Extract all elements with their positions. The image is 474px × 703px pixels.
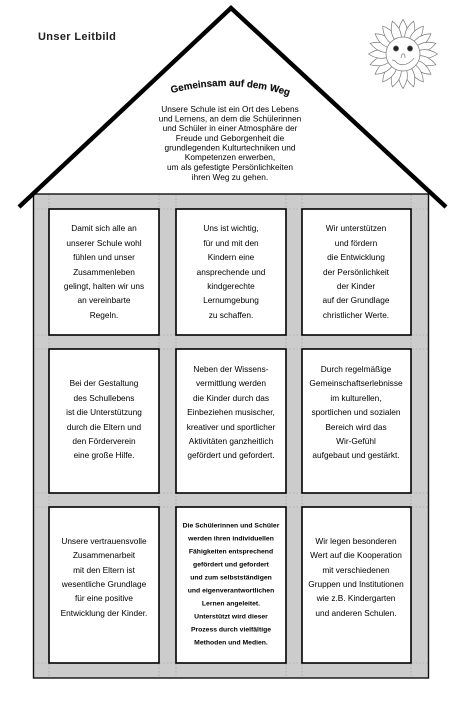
panel: row 3 column 2: Methoden und Medien. (194, 640, 268, 646)
panel: row 3 column 2 (176, 507, 286, 663)
roof text block: ihren Weg zu gehen. (192, 172, 268, 182)
panel: row 1 column 2: zu schaffen. (209, 310, 253, 320)
panel: row 3 column 3: Wert auf die Kooperation (310, 550, 402, 560)
panel: row 2 column 1: des Schullebens (74, 393, 134, 403)
panel: row 2 column 2: Einbeziehen musischer, (187, 407, 275, 417)
panel: row 3 column 1: Zusammenarbeit (73, 550, 136, 560)
panel: row 2 column 2: kreativer und sportlicher (187, 422, 276, 432)
panel: row 3 column 2: werden ihren individuellen (187, 536, 274, 542)
panel: row 2 column 3: Bereich wird das (325, 422, 387, 432)
panel: row 2 column 2: Aktivitäten ganzheitlich (189, 436, 274, 446)
panel: row 1 column 2: Uns ist wichtig, (203, 223, 259, 233)
panel: row 2 column 1: eine große Hilfe. (74, 450, 134, 460)
panel: row 1 column 1: fühlen und unser (73, 252, 135, 262)
panel: row 1 column 2: ansprechende und (197, 267, 266, 277)
panel: row 2 column 3: sportlichen und sozialen (311, 407, 401, 417)
panel: row 2 column 2: vermittlung werden (196, 378, 266, 388)
panel: row 2 column 2: die Kinder durch das (193, 393, 269, 403)
panel: row 3 column 3: mit verschiedenen (322, 565, 390, 575)
panel: row 3 column 2: Fähigkeiten entsprechend (189, 548, 273, 556)
panel: row 3 column 3: wie z.B. Kindergarten (316, 593, 396, 603)
panel: row 1 column 3: christlicher Werte. (323, 310, 389, 320)
roof text block (159, 104, 302, 182)
title: Unser Leitbild (38, 31, 116, 43)
panel: row 1 column 2: für und mit den (203, 238, 259, 248)
panel: row 3 column 2: Lernen angeleitet. (202, 600, 260, 608)
panel: row 2 column 1: Bei der Gestaltung (70, 378, 139, 388)
panel: row 3 column 1: für eine positive (75, 593, 133, 603)
roof heading: curved motto: Gemeinsam auf dem Weg (170, 80, 290, 97)
panel: row 3 column 3: Gruppen und Institutionen (308, 579, 404, 589)
panel: row 3 column 1 (49, 507, 159, 663)
panel: row 2 column 2: Neben der Wissens- (193, 364, 269, 374)
roof text block: Kompetenzen erwerben, (185, 152, 275, 162)
roof text block: Freude und Geborgenheit die (176, 133, 285, 143)
panel: row 1 column 3: und fördern (335, 238, 378, 248)
panel: row 1 column 1: Damit sich alle an (71, 223, 137, 233)
panel: row 1 column 2: Kindern eine (208, 252, 255, 262)
roof text block: Unsere Schule ist ein Ort des Lebens (161, 104, 299, 114)
icon: sun (368, 20, 438, 88)
panel: row 1 column 3: auf der Grundlage (323, 295, 390, 305)
panel: row 2 column 1: durch die Eltern und (67, 422, 142, 432)
panel: row 3 column 3: und anderen Schulen. (315, 608, 397, 618)
house body (34, 194, 428, 678)
panel: row 3 column 3 (302, 507, 411, 663)
panel: row 2 column 2: gefördert und gefordert. (187, 450, 275, 460)
roof text block: und Lernens, an dem die Schülerinnen (159, 114, 302, 124)
panel: row 1 column 1: an vereinbarte (77, 295, 131, 305)
panel: row 2 column 3: Gemeinschaftserlebnisse (309, 378, 403, 388)
panel: row 3 column 1: wesentliche Grundlage (61, 579, 147, 589)
roof text block: und Schüler in einer Atmosphäre der (163, 123, 298, 133)
panel: row 1 column 1: Zusammenleben (73, 267, 135, 277)
panel: row 3 column 1: mit den Eltern ist (73, 565, 136, 575)
panel: row 1 column 1: gelingt, halten wir uns (64, 281, 144, 291)
panel: row 2 column 1: ist die Unterstützung (66, 407, 142, 417)
panel: row 3 column 2: Die Schülerinnen und Schüler (183, 522, 280, 530)
panel: row 1 column 2: Lernumgebung (203, 295, 259, 305)
panel: row 1 column 2 (176, 209, 286, 335)
panel: row 2 column 1 (49, 349, 159, 493)
panel: row 1 column 3: die Entwicklung (327, 252, 385, 262)
panel: row 2 column 3 (302, 349, 411, 493)
panel: row 2 column 3: Durch regelmäßige (321, 364, 392, 374)
roof text block: grundlegenden Kulturtechniken und (164, 142, 296, 152)
panel: row 1 column 1 (49, 209, 159, 335)
panel: row 1 column 3: der Kinder (337, 281, 375, 291)
panel: row 3 column 1: Unsere vertrauensvolle (61, 536, 147, 546)
panel: row 1 column 3: Wir unterstützen (326, 223, 387, 233)
panel: row 3 column 2: und zum selbstständigen (190, 574, 272, 582)
panel: row 2 column 1: den Förderverein (72, 436, 136, 446)
roof text block: um als gefestigte Persönlichkeiten (167, 162, 293, 172)
panel: row 3 column 2: und eigenverantwortlichen (188, 588, 274, 594)
panel: row 2 column 3: Wir-Gefühl (336, 436, 376, 446)
panel: row 3 column 2: Unterstützt wird dieser (194, 614, 268, 620)
panel: row 3 column 2: Prozess durch vielfältige (191, 626, 271, 634)
panel: row 2 column 2 (176, 349, 286, 493)
panel: row 2 column 3: im kulturellen, (330, 393, 382, 403)
panel: row 1 column 2: kindgerechte (207, 281, 255, 291)
roof (19, 8, 446, 207)
panel: row 1 column 3: der Persönlichkeit (323, 267, 390, 277)
panel: row 3 column 1: Entwicklung der Kinder. (61, 608, 147, 618)
panel: row 2 column 3: aufgebaut und gestärkt. (312, 450, 400, 460)
panel: row 1 column 1: Regeln. (90, 310, 118, 320)
panel: row 1 column 1: unserer Schule wohl (66, 238, 142, 248)
panel: row 3 column 2: gefördert und gefordert (193, 562, 270, 568)
panel: row 3 column 3: Wir legen besonderen (315, 536, 397, 546)
panel: row 1 column 3 (302, 209, 411, 335)
